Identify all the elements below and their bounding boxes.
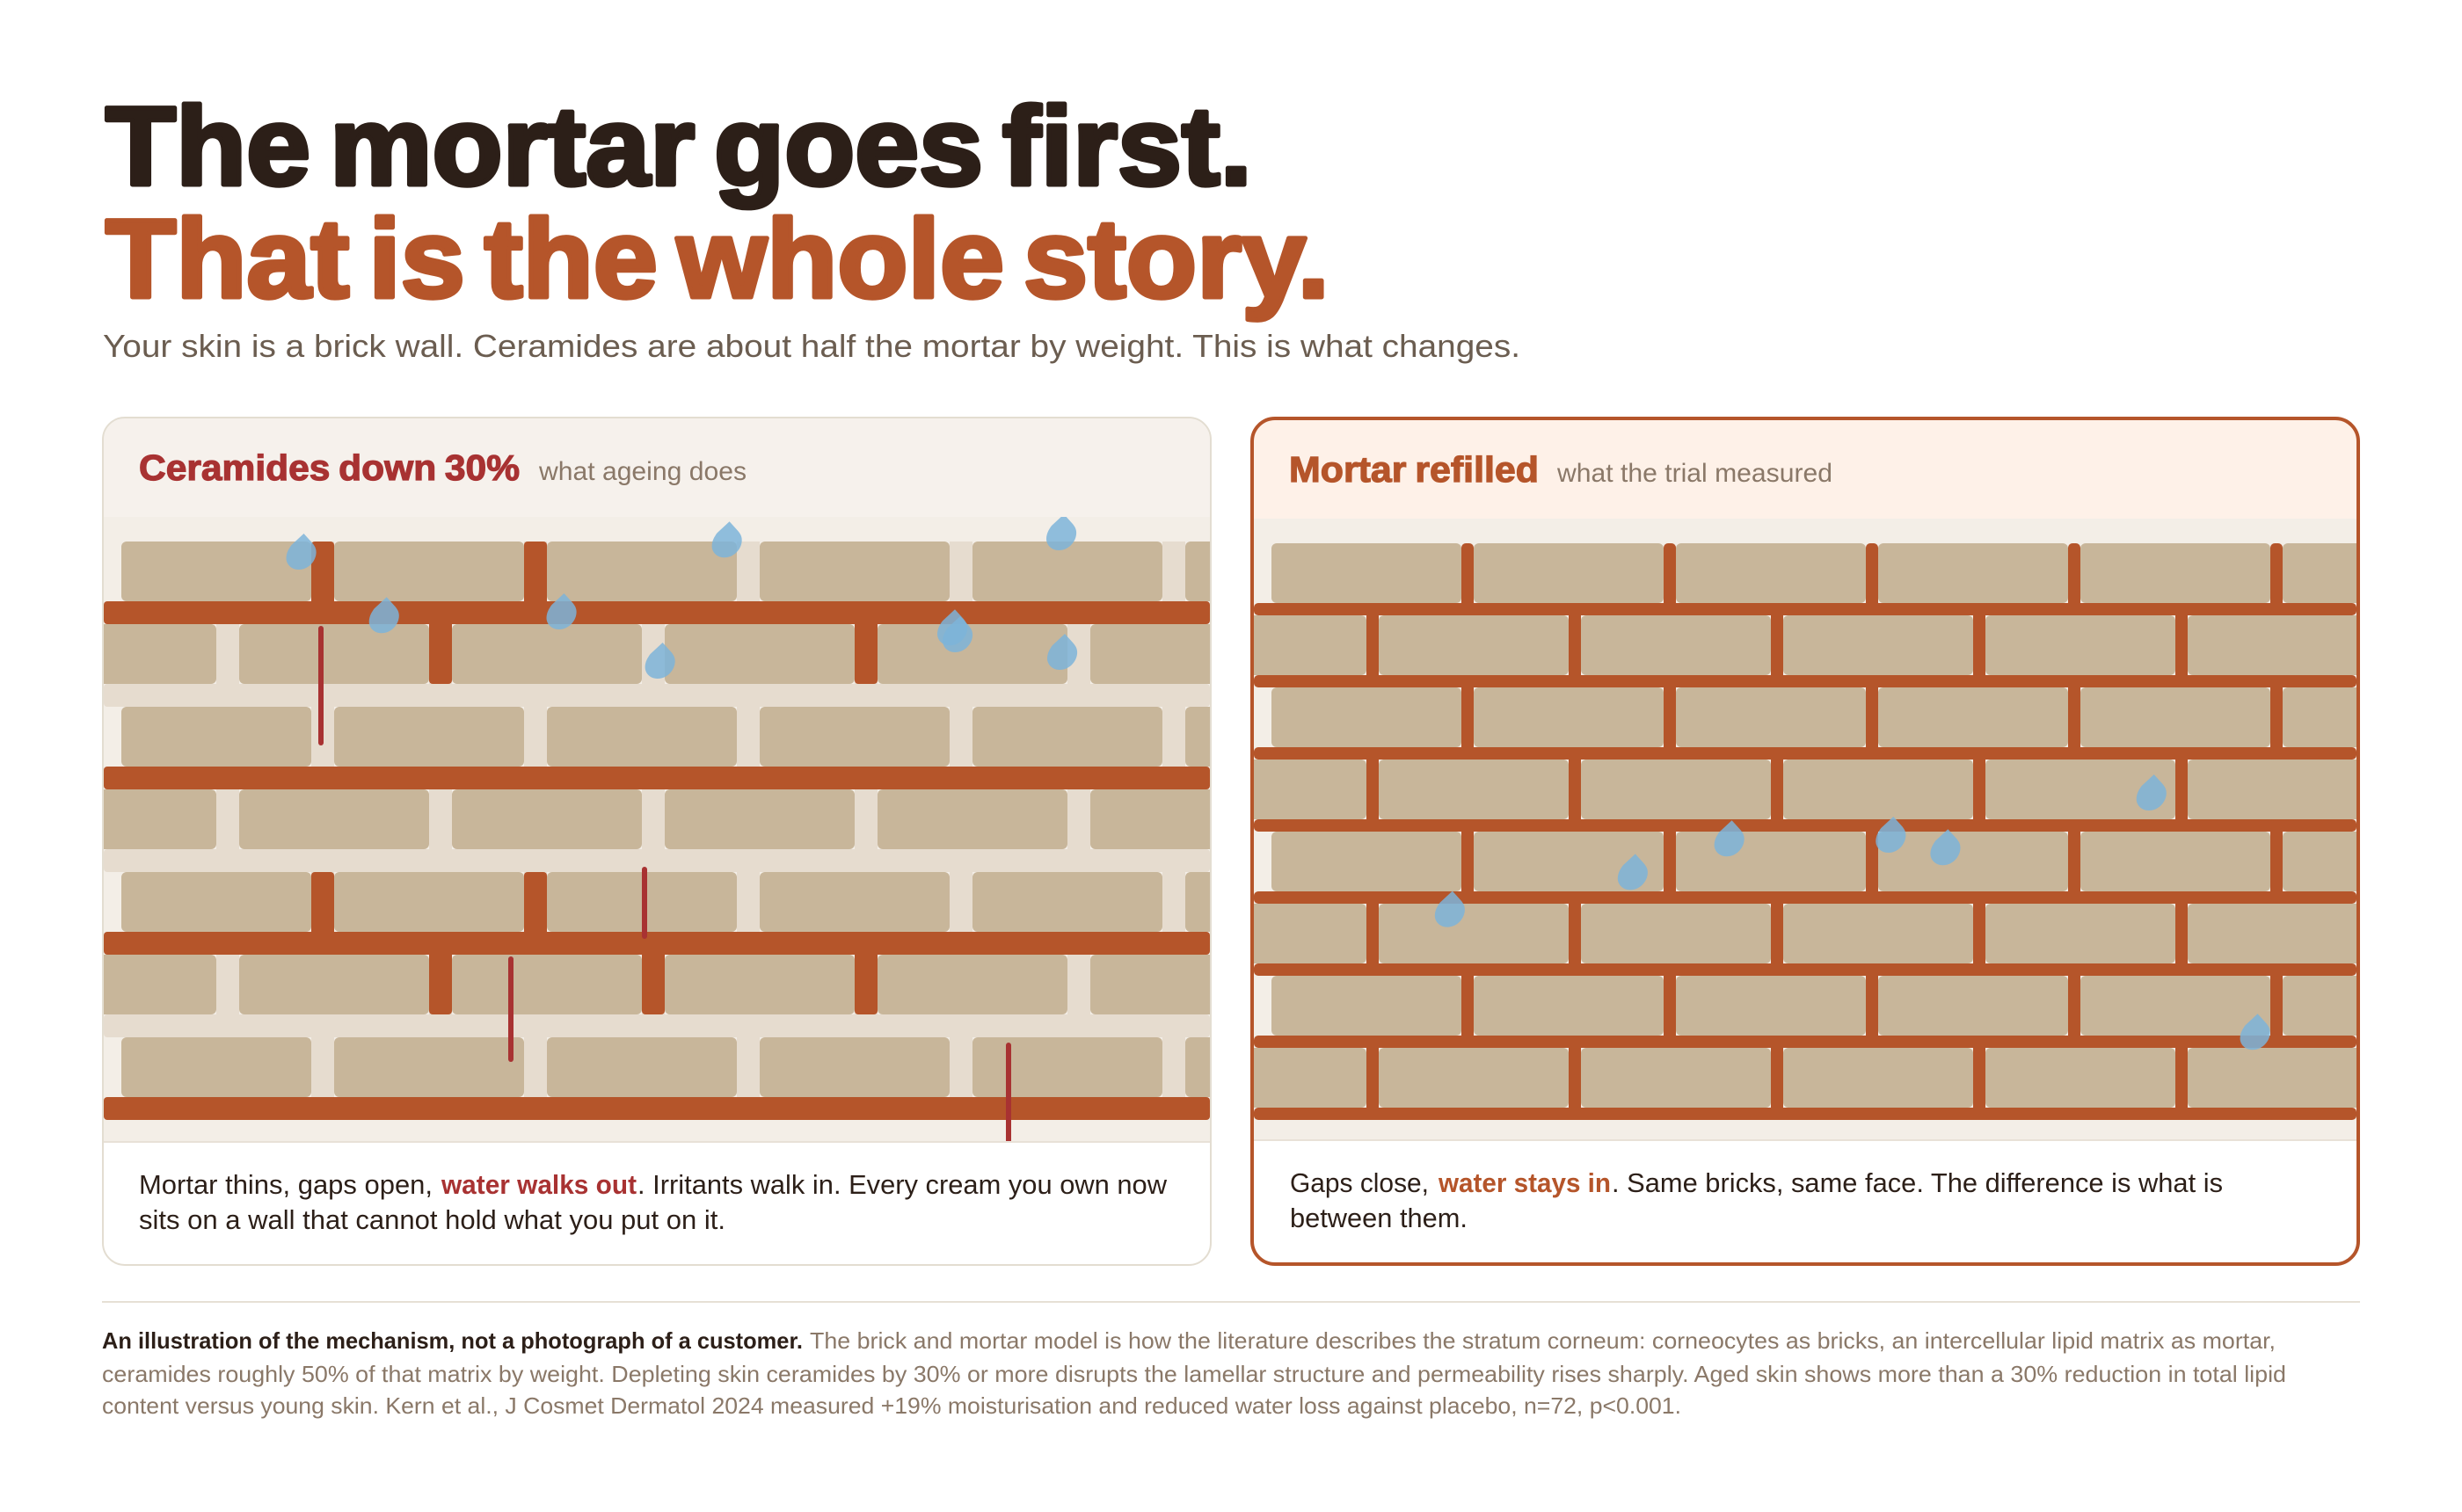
heading: mortar refilled: Mortar refilled [1289, 449, 1539, 490]
caption: mortar refilled: Gaps close, [1290, 1167, 1429, 1198]
caption: ceramides down: Mortar thins, gaps open, [139, 1169, 433, 1200]
subtitle: Your skin is a brick wall. Ceramides are about half the mortar by weight. This is what changes. [103, 328, 1520, 364]
heading note: what ageing does: what ageing does [538, 457, 747, 486]
caption: mortar refilled: . Same bricks, same face. The difference is what is [1612, 1167, 2223, 1198]
brick wall: depleted mortar [26, 514, 1375, 1148]
title [106, 84, 1329, 321]
cracks [318, 626, 1011, 1148]
vertical mortar joints [1366, 543, 2283, 1113]
infographic canvas [102, 102, 2360, 1419]
footnote: An illustration of the mechanism, not a photograph of a customer. [102, 1327, 803, 1354]
caption: mortar refilled: between them. [1290, 1203, 1468, 1233]
panel: mortar refilled [1250, 417, 2360, 1266]
water drops escaping [287, 514, 1077, 679]
title: That is the whole story. [106, 196, 1329, 321]
caption: ceramides down: sits on a wall that cannot hold what you put on it. [139, 1204, 725, 1235]
footnote: content versus young skin. Kern et al., J Cosmet Dermatol 2024 measured +19% moisturisation and reduced water loss against placebo, n=72, p<0.001. [102, 1392, 1681, 1419]
panel header band: mortar refilled [1254, 420, 2356, 519]
horizontal mortar lines [1254, 603, 2356, 1120]
heading note: what the trial measured: what the trial measured [1556, 459, 1832, 488]
caption: ceramides down [139, 1169, 1168, 1235]
remaining mortar: horizontal and vertical pieces [104, 542, 1210, 1120]
brick wall: full mortar [1254, 543, 2356, 1120]
caption: mortar refilled [1290, 1167, 2223, 1233]
footnote: ceramides roughly 50% of that matrix by weight. Depleting skin ceramides by 30% or more disrupts the lamellar structure and permeability rises sharply. Aged skin shows more than a 30% reduction in total lipid [102, 1361, 2286, 1387]
panel header band: ceramides down [104, 418, 1210, 517]
panel: ceramides down [102, 417, 1212, 1266]
water drops retained [1435, 774, 2270, 1050]
heading: ceramides down 30%: Ceramides down 30% [139, 447, 520, 488]
title: The mortar goes first. [106, 84, 1252, 208]
footnote: The brick and mortar model is how the literature describes the stratum corneum: corneocytes as bricks, an intercellular lipid matrix as mortar, [810, 1327, 2276, 1354]
caption: mortar refilled: water stays in [1438, 1167, 1611, 1198]
footnote [102, 1327, 2286, 1419]
caption: ceramides down: water walks out [441, 1169, 637, 1200]
caption: ceramides down: . Irritants walk in. Every cream you own now [637, 1169, 1168, 1200]
